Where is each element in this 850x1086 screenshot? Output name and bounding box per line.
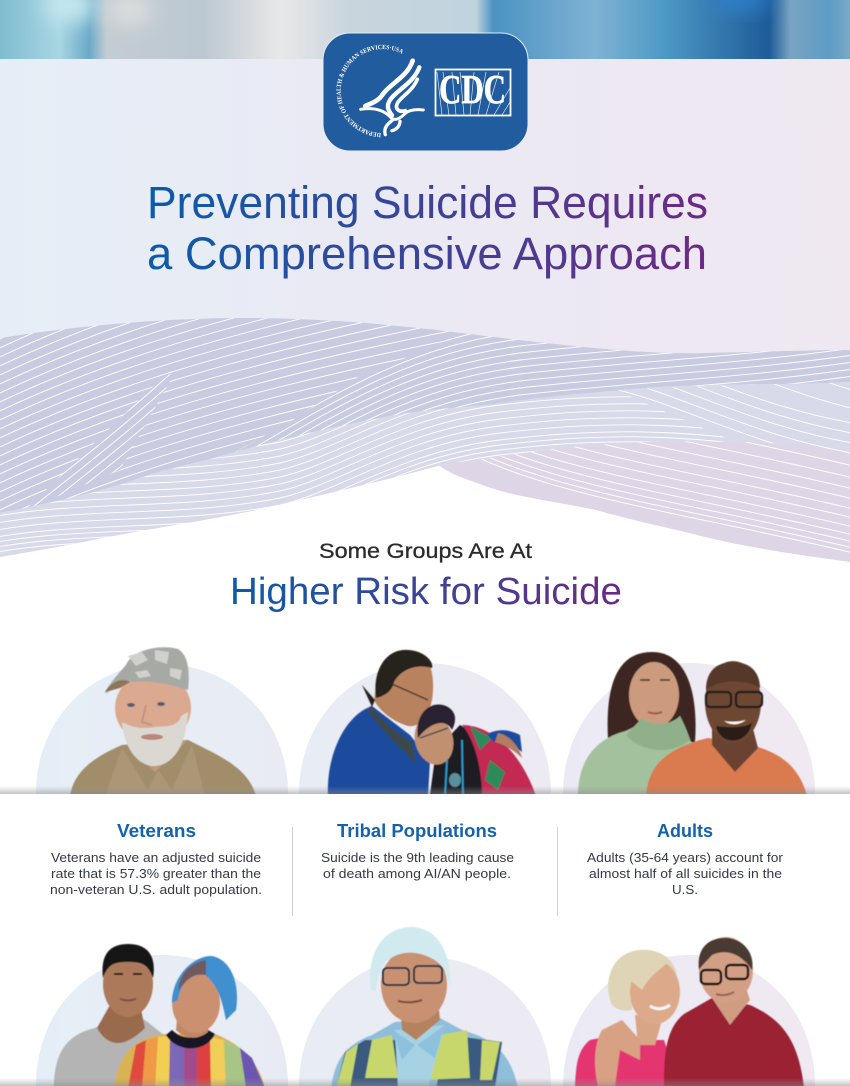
card: Tribal Populations [321, 821, 514, 881]
icon: HHS eagle [361, 61, 423, 135]
shadow strip row 2 [0, 1078, 850, 1086]
divider [557, 827, 558, 916]
photo row 1 [36, 647, 815, 796]
blurred photo band [0, 0, 850, 59]
section heading [230, 540, 622, 613]
title: a Comprehensive Approach [147, 228, 707, 279]
people: older woman and man [575, 937, 804, 1086]
body text: almost half of all suicides in the [589, 866, 782, 881]
body text: U.S. [672, 882, 698, 897]
arch background: veterans [36, 664, 288, 794]
people: tribal couple [328, 650, 536, 796]
arch background: LGBTQ youth [36, 955, 288, 1086]
shadow strip row 1 [0, 786, 850, 794]
body text: Veterans have an adjusted suicide [51, 850, 261, 865]
people: youths [54, 944, 265, 1086]
body text [587, 850, 784, 897]
heading: Higher Risk for Suicide: Higher Risk for Suicide [230, 571, 622, 613]
person: veteran [70, 647, 256, 796]
people: adults [578, 652, 807, 796]
card: Adults [587, 821, 784, 897]
body text [50, 850, 262, 897]
heading: Veterans [117, 821, 196, 841]
heading: Tribal Populations [337, 821, 497, 841]
page background [0, 59, 850, 460]
arch background: couple [563, 955, 815, 1086]
HHS circular wordmark: DEPARTMENT OF HEALTH & HUMAN SERVICES·USA [336, 44, 402, 138]
arch background: tribal [299, 663, 551, 794]
arch background: adults [563, 663, 815, 794]
card: Veterans [50, 821, 262, 897]
photo row 2 [36, 927, 815, 1086]
CDC logo: CDC [439, 66, 506, 112]
kicker text: Some Groups Are At [319, 540, 532, 563]
heading: Adults [657, 821, 713, 841]
title [147, 177, 708, 279]
body text: Suicide is the 9th leading cause [321, 850, 514, 865]
title: Preventing Suicide Requires [147, 177, 708, 228]
body text: non-veteran U.S. adult population. [50, 882, 262, 897]
wave graphic [0, 318, 850, 562]
body text [321, 850, 514, 881]
logo badge [322, 32, 528, 150]
body text: of death among AI/AN people. [323, 866, 511, 881]
divider [292, 827, 293, 916]
person: worker [331, 927, 518, 1086]
arch background: worker [299, 957, 551, 1086]
body text: rate that is 57.3% greater than the [51, 866, 261, 881]
body text: Adults (35-64 years) account for [587, 850, 784, 865]
